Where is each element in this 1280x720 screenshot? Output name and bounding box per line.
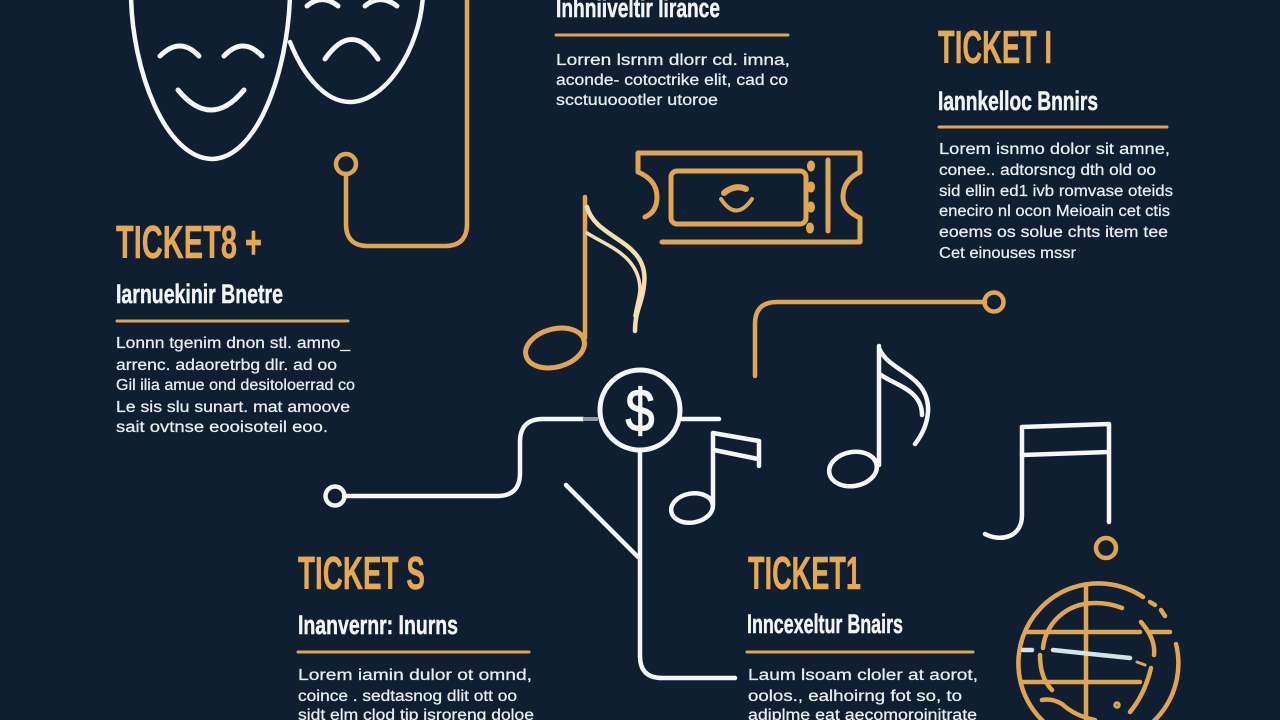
body text: Gil ilia amue ond desitoloerrad co [116,377,355,394]
body text: Lorem iamin dulor ot omnd, [298,667,532,684]
body text [748,667,978,720]
rule [298,650,529,654]
body text: oolos., ealhoirng fot so, to [748,688,962,705]
icon: tragedy mask [290,0,423,102]
rule [939,126,1167,128]
title: TICKET8 + [116,216,262,268]
title: TICKET S [298,547,425,599]
icon: ticket [638,153,860,242]
body text: Cet einouses mssr [939,245,1076,262]
body text: aconde- cotoctrike elit, cad co [556,72,788,89]
panel: ticket 8 [116,216,355,436]
body text: Laum lsoam cloler at aorot, [748,667,978,684]
title: TICKET1 [748,547,861,599]
icon: globe [1018,583,1178,720]
body text: scctuuoootler utoroe [556,92,718,109]
body text: eneciro nl ocon Meioain cet ctis [939,203,1170,220]
panel: ticket 1 [747,547,978,720]
panel: top centre text [556,0,790,109]
arrow: gold connector right [755,292,1004,376]
body text: eoems os solue chts item tee [939,224,1168,241]
body text: Lorren lsrnm dlorr cd. imna, [556,52,790,69]
body text [939,141,1173,262]
body text: Le sis slu sunart. mat amoove [116,399,350,416]
icon: white beamed notes [985,424,1109,538]
icon: dollar hub with connectors [326,370,735,678]
subheading: Inncexeltur Bnairs [747,609,903,639]
title: TICKET I [938,21,1052,73]
icon: white eighth note [826,346,928,490]
subheading: Iarnuekinir Bnetre [116,279,283,309]
panel: ticket S [298,547,534,720]
body text: conee.. adtorsncg dth old oo [939,162,1156,179]
panel: ticket I [938,21,1173,262]
rule [556,34,788,36]
body text: Lonnn tgenim dnon stl. amno_ [116,335,350,352]
body text: Lorem isnmo dolor sit amne, [939,141,1170,158]
body text: sid ellin ed1 ivb romvase oteids [939,183,1173,200]
icon: comedy mask [131,0,290,159]
subheading: Iannkelloc Bnnirs [938,86,1098,116]
body text: sait ovtnse eooisoteil eoo. [116,419,328,436]
body text: coince . sedtasnog dlit ott oo [298,688,517,705]
rule [117,320,348,322]
body text: arrenc. adaoretrbg dlr. ad oo [116,357,337,374]
icon: small white note [669,433,759,526]
icon: gold music note [521,197,644,374]
body text [116,335,355,436]
arrow: gold connector from masks [336,0,467,246]
body text [298,667,534,720]
icon: dollar hub with connectors: $ [626,377,654,444]
icon: gold ring [1096,538,1116,558]
subheading: Inanvernr: Inurns [298,610,458,640]
body text [556,52,790,109]
rule [747,650,973,654]
